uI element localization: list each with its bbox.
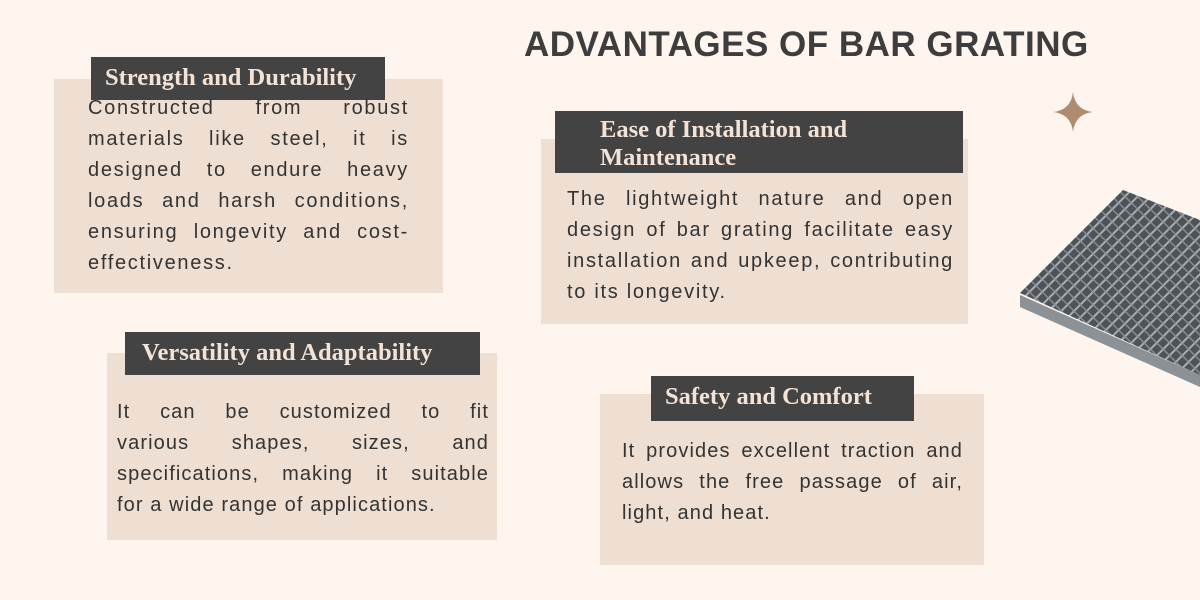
text: strength: Constructed from robust materials like steel, it is designed to endure heavy loads and harsh conditions, ensuring longevity and cost-effectiveness. xyxy=(88,97,409,274)
heading: safety: Safety and Comfort xyxy=(665,383,872,410)
text: versatility: for a wide range of applications. xyxy=(117,494,436,516)
heading: strength: Strength and Durability xyxy=(105,64,356,91)
image: bar grating xyxy=(1020,190,1200,387)
text: safety: allows the free passage of air, xyxy=(622,471,963,493)
panel: versatility xyxy=(107,353,497,540)
text: ease: The lightweight nature and open design of bar grating facilitate easy installation and upkeep, contributing to its longevity. xyxy=(567,188,954,303)
panel: ease of installation xyxy=(541,139,968,324)
text: safety: light, and heat. xyxy=(622,502,771,524)
text: versatility xyxy=(117,401,489,516)
panel: strength and durability xyxy=(54,79,443,293)
heading: versatility: Versatility and Adaptability xyxy=(142,339,432,366)
heading: versatility xyxy=(125,332,480,375)
panel: safety xyxy=(600,394,984,565)
heading: ease xyxy=(555,111,963,173)
heading: ease: Ease of Installation and xyxy=(600,116,847,143)
text: versatility: specifications, making it suitable xyxy=(117,463,489,485)
heading: strength xyxy=(91,57,385,100)
icon: sparkle star xyxy=(1053,92,1093,132)
text: versatility: various shapes, sizes, and xyxy=(117,432,489,454)
text: safety xyxy=(622,440,963,524)
title: ADVANTAGES OF BAR GRATING xyxy=(524,25,1089,64)
text: versatility: It can be customized to fit xyxy=(117,401,489,423)
heading: safety xyxy=(651,376,914,421)
text: safety: It provides excellent traction and xyxy=(622,440,963,462)
heading: ease: Maintenance xyxy=(600,144,736,171)
